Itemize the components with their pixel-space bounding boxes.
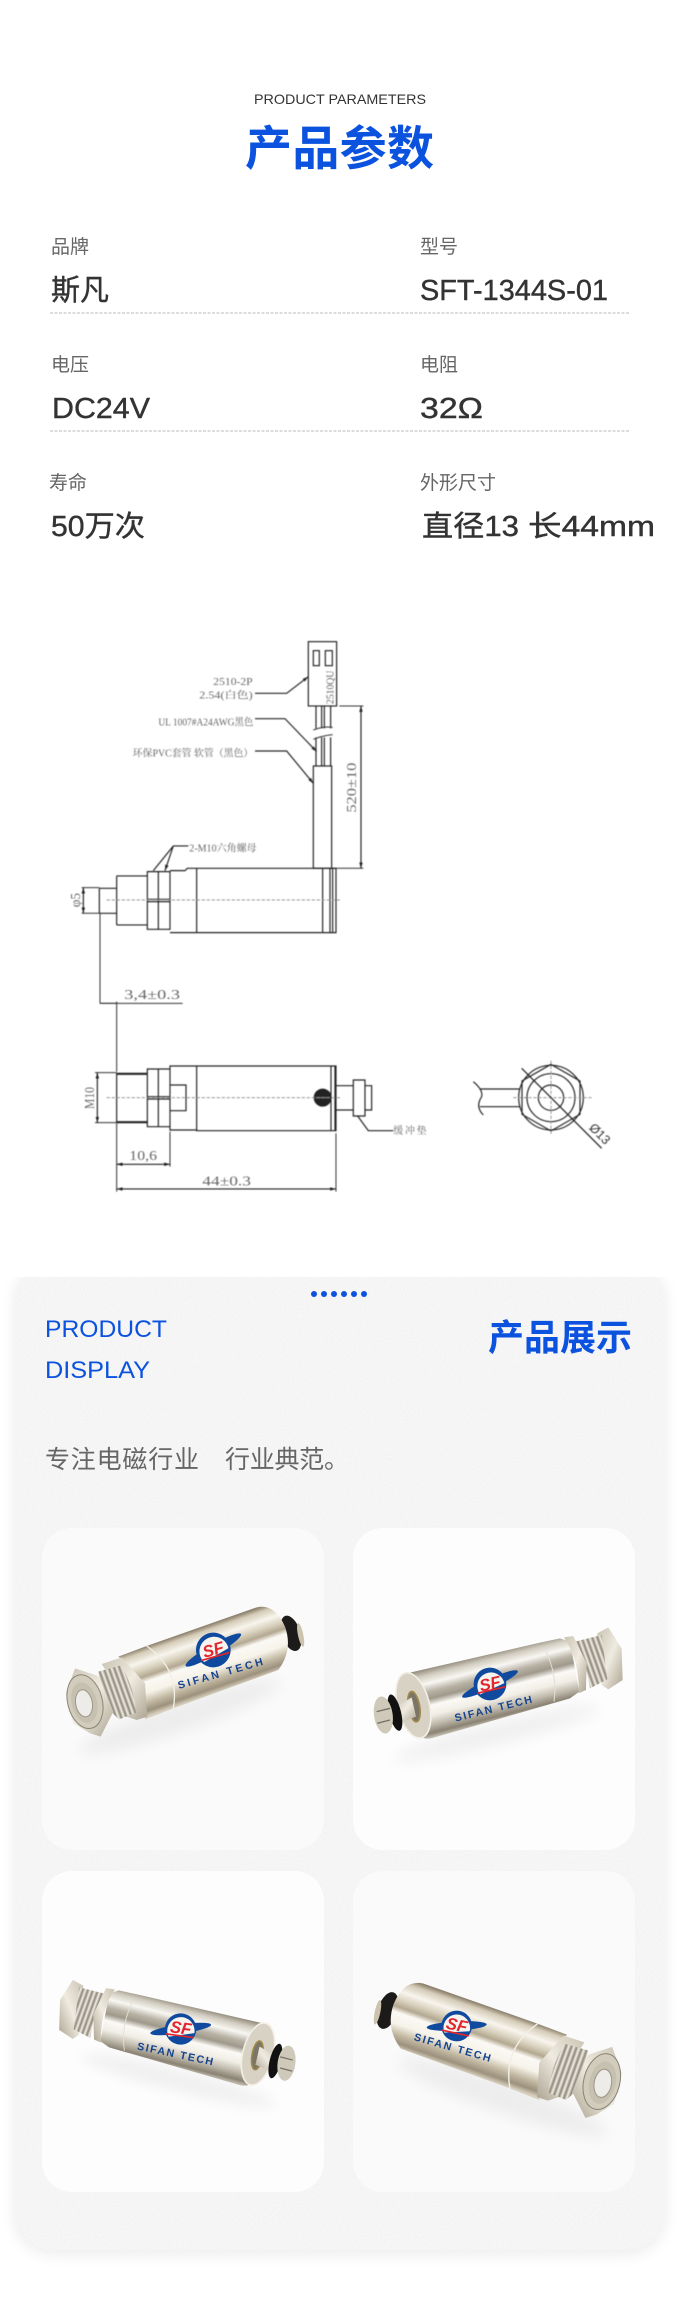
logo 3 <box>136 2009 214 2068</box>
section: product parameters <box>49 91 655 543</box>
dimension: M10: M10 <box>82 1087 97 1109</box>
param: resistance: 电阻 <box>420 354 458 376</box>
param: brand <box>51 236 109 307</box>
logo 4: SIFAN TECH <box>412 2031 492 2065</box>
dimension: M10 <box>82 1073 117 1123</box>
param: dimensions: 长44mm <box>528 510 655 543</box>
param: resistance <box>420 354 483 425</box>
technical drawing <box>68 642 613 1192</box>
product photo 2 <box>371 1627 623 1770</box>
logo 1: SIFAN TECH <box>177 1656 264 1692</box>
logo 2 <box>453 1656 533 1725</box>
product photo 1 <box>62 1607 306 1766</box>
param: lifetime <box>49 472 145 543</box>
param: voltage <box>51 354 151 425</box>
param: lifetime: 寿命 <box>49 472 87 494</box>
heading: product display en: DISPLAY <box>45 1357 150 1384</box>
param: lifetime: 50万次 <box>51 510 145 543</box>
side view drawing <box>82 940 427 1192</box>
logo 2: SIFAN TECH <box>453 1694 533 1725</box>
photo card 1 <box>42 1528 324 1850</box>
logo 3: SF <box>169 2017 193 2039</box>
photo card 2 <box>353 1528 635 1850</box>
dimension: 10.6: 10,6 <box>129 1148 157 1163</box>
connector code: 2510QU <box>325 671 336 704</box>
label: hex nuts <box>153 841 257 871</box>
dimension: 520±10 <box>332 706 363 868</box>
param: brand: 品牌 <box>51 236 89 258</box>
logo 3: SIFAN TECH <box>136 2041 214 2068</box>
param: model: 型号 <box>420 236 458 258</box>
panel: product display <box>15 1264 665 2254</box>
dimension: 10.6 <box>117 1123 170 1192</box>
end view drawing <box>473 1061 613 1148</box>
param: dimensions <box>420 472 655 543</box>
heading: product display en: PRODUCT <box>45 1316 167 1343</box>
param: brand: 斯凡 <box>51 274 109 307</box>
dimension: phi 5 <box>68 888 99 913</box>
end view circles <box>513 1061 592 1135</box>
param: dimensions: 直径13 <box>422 510 519 543</box>
logo 1 <box>177 1619 264 1692</box>
dots <box>311 1291 367 1297</box>
product photo 3 <box>59 1980 298 2116</box>
dimension: phi 5: φ5 <box>68 893 83 907</box>
photo card 3 <box>42 1871 324 2192</box>
heading: product display en <box>45 1316 167 1384</box>
label: sleeve <box>133 747 313 783</box>
param: voltage: DC24V <box>52 393 151 425</box>
label: buffer pad: 缓冲垫 <box>393 1124 427 1137</box>
photo card 4 <box>353 1871 635 2192</box>
card shadow <box>15 1264 665 2254</box>
param: model <box>420 236 608 307</box>
label: wire <box>158 715 317 752</box>
solenoid top view <box>99 868 342 933</box>
logo 1: SF <box>200 1638 227 1662</box>
card background <box>15 1264 665 2250</box>
param: dimensions: 外形尺寸 <box>420 472 496 494</box>
label: hex nuts: 2-M10六角螺母 <box>189 841 257 854</box>
label: wire: UL 1007#A24AWG黑色 <box>158 715 253 728</box>
top view drawing <box>68 642 363 940</box>
wires and sleeve <box>313 706 333 868</box>
dimension: 520±10: 520±10 <box>344 762 359 813</box>
slogan: 专注电磁行业 <box>45 1446 199 1474</box>
cable stub <box>473 1082 520 1115</box>
label: connector type: 2.54(白色) <box>199 689 253 702</box>
param: resistance: 32Ω <box>420 393 483 425</box>
slogan: 行业典范。 <box>225 1446 349 1474</box>
dimension: 3.4 <box>100 940 183 1072</box>
logo 4 <box>412 2009 492 2065</box>
product photo 4 <box>372 1983 626 2148</box>
param: model: SFT-1344S-01 <box>420 275 608 307</box>
solenoid side view <box>107 1066 372 1131</box>
title: 产品参数 <box>245 122 434 175</box>
label: connector type: 2510-2P <box>213 677 253 688</box>
dimension: 44: 44±0.3 <box>202 1174 251 1189</box>
label: buffer pad <box>358 1116 427 1137</box>
heading: product display zh: 产品展示 <box>488 1317 632 1358</box>
label: connector type <box>199 677 308 702</box>
dimension: diameter 13: Ø13 <box>586 1121 613 1147</box>
subtitle: product parameters: PRODUCT PARAMETERS <box>254 91 426 107</box>
dimension: 3.4: 3,4±0.3 <box>124 987 180 1002</box>
slogan <box>45 1446 349 1474</box>
connector <box>308 642 337 706</box>
label: sleeve: 环保PVC套管 软管（黑色） <box>133 747 253 760</box>
logo 4: SF <box>444 2014 470 2037</box>
param: voltage: 电压 <box>51 354 89 376</box>
logo 2: SF <box>477 1672 503 1695</box>
